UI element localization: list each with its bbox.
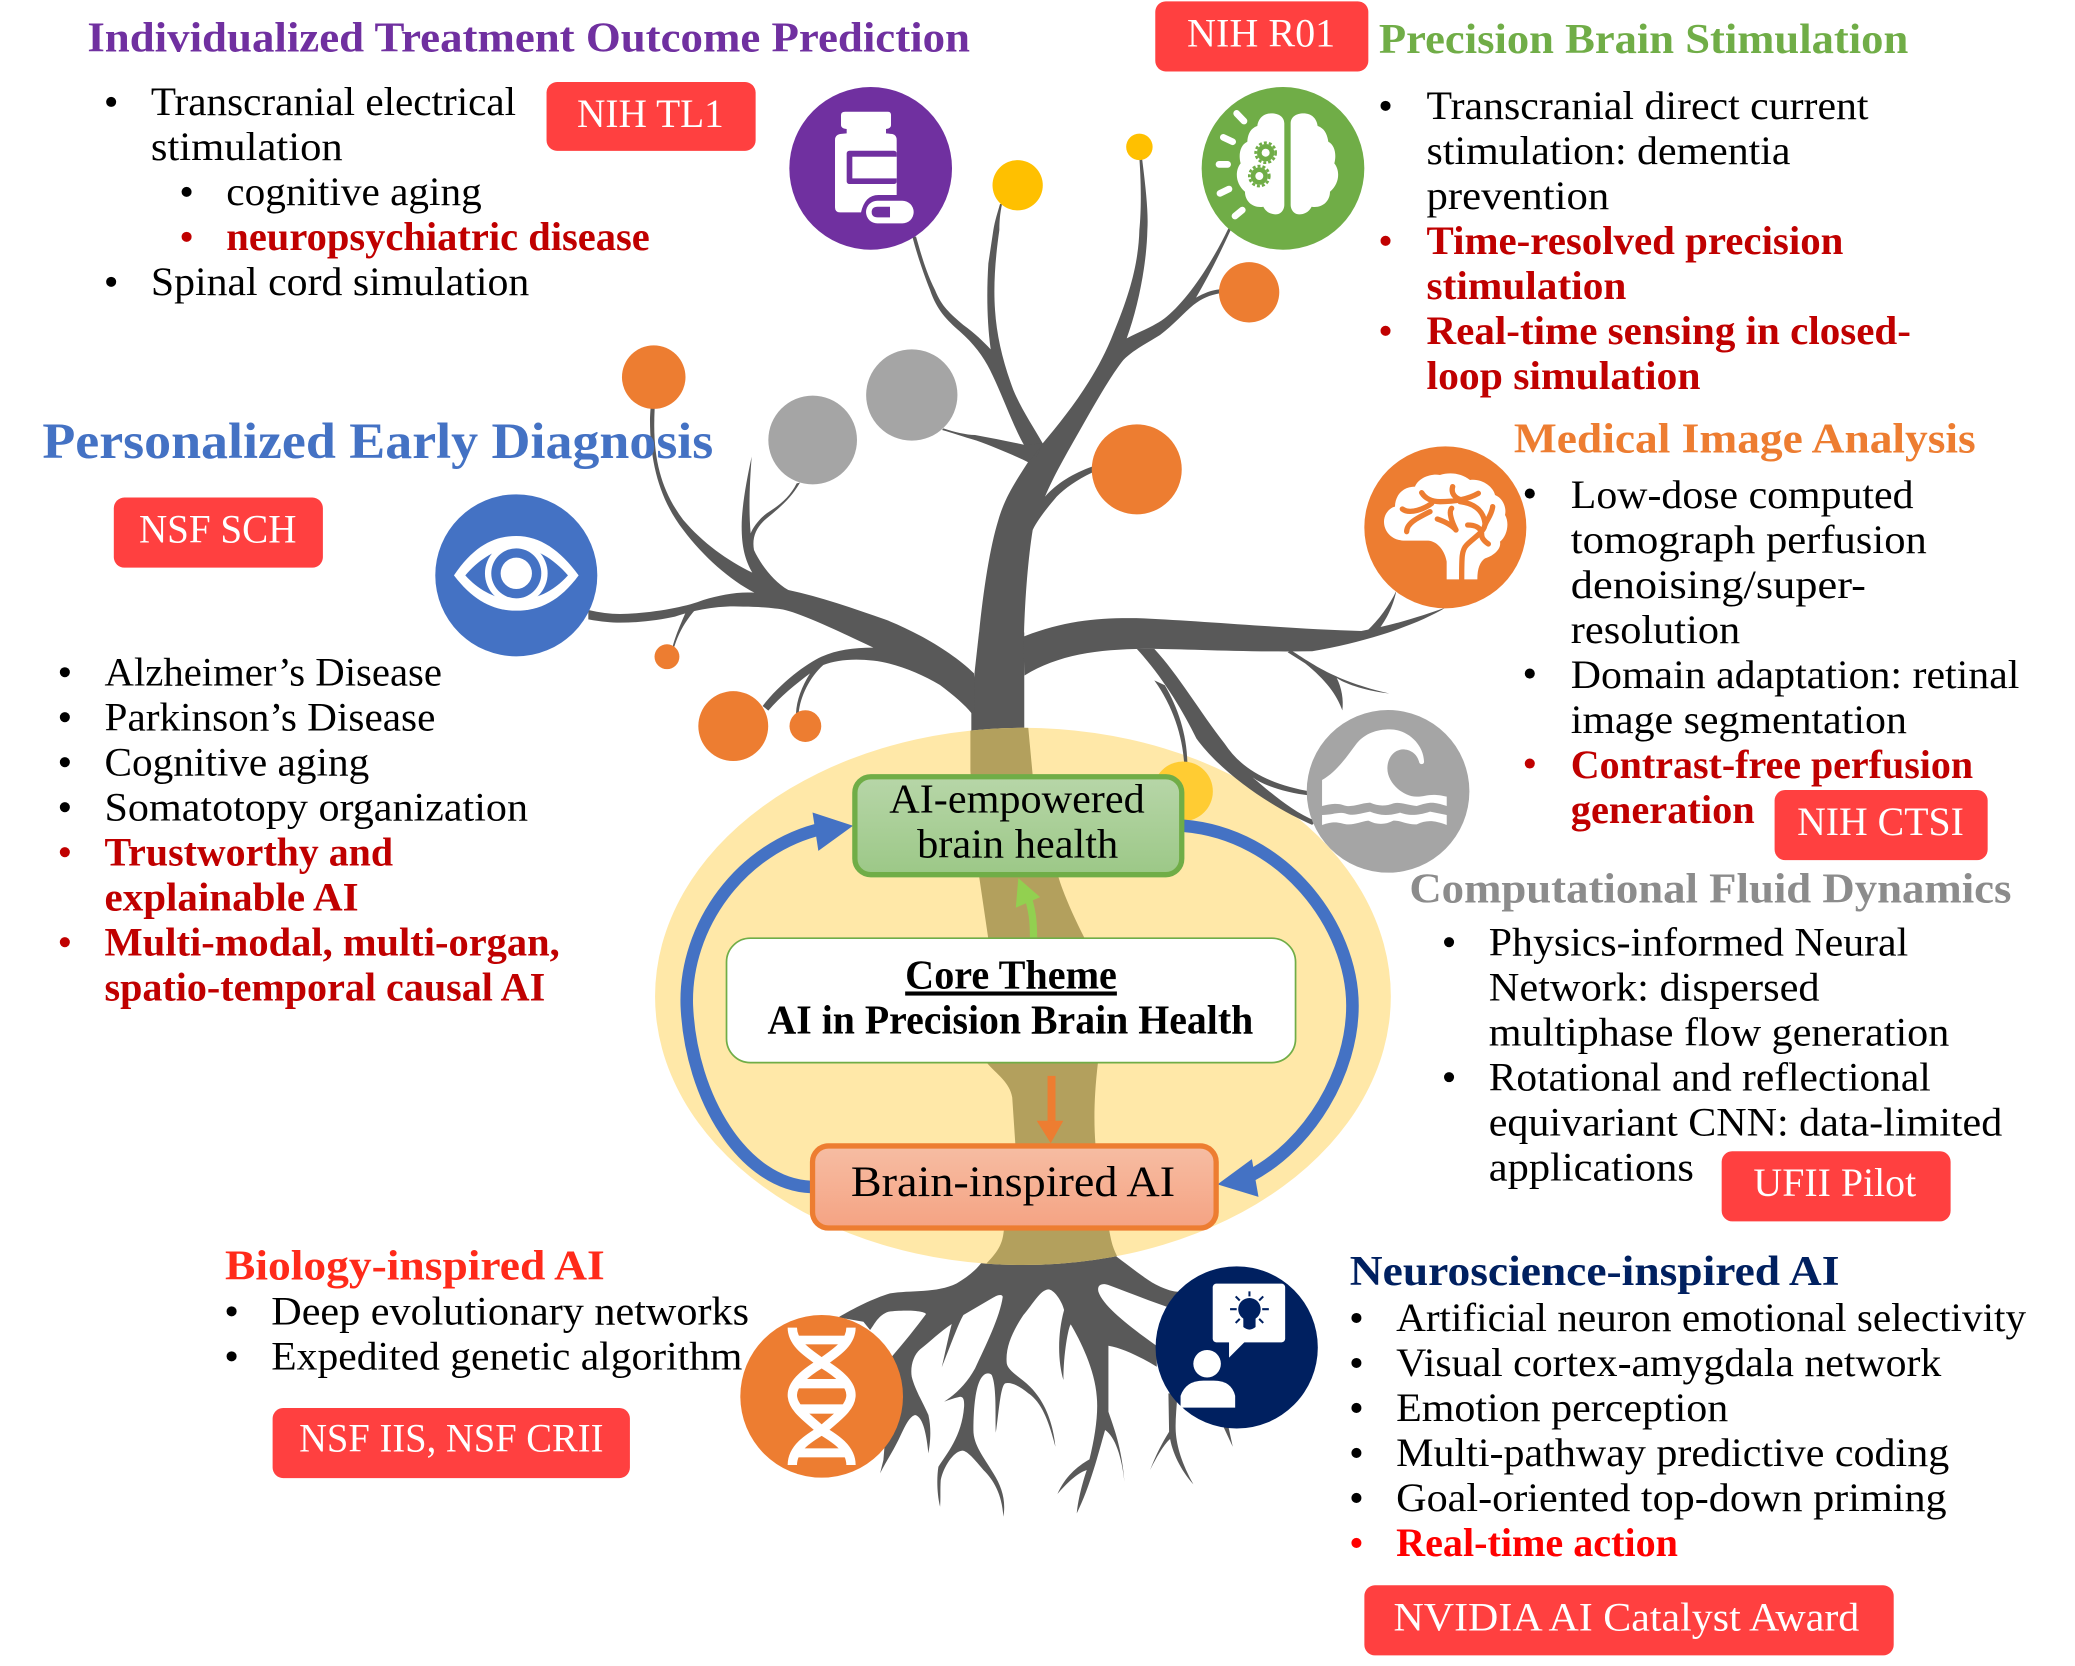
heading: neuroscience-inspired AI: Neuroscience-inspired AI	[1350, 1248, 1839, 1295]
list: personalized early diagnosis: Somatotopy organization	[105, 785, 528, 829]
list: neuroscience-inspired AI: Emotion perception	[1396, 1386, 1728, 1430]
badge: NIH CTSI: NIH CTSI	[1797, 800, 1964, 844]
list: medical image analysis: image segmentation	[1571, 698, 1907, 742]
icon: eye	[435, 494, 597, 656]
list: personalized early diagnosis: Alzheimer’s Disease	[105, 650, 442, 694]
list: biology-inspired AI	[227, 1290, 749, 1379]
list: medical image analysis: Domain adaptation: retinal	[1571, 653, 2019, 697]
badge: NIH TL1: NIH TL1	[577, 92, 724, 136]
fruit circles on the tree	[622, 134, 1279, 821]
list: computational fluid dynamics: equivariant CNN: data-limited	[1489, 1100, 2002, 1144]
list: medical image analysis: resolution	[1571, 608, 1740, 652]
badge: NSF SCH	[114, 498, 323, 568]
list: personalized early diagnosis: Multi-modal, multi-organ,	[105, 920, 560, 964]
badge: NSF IIS, NSF CRII	[273, 1408, 630, 1478]
arrow: core theme to brain-inspired AI	[1037, 1076, 1063, 1143]
panel: medical image analysis	[1514, 416, 2019, 832]
box: brain-inspired AI	[813, 1146, 1216, 1228]
right lower branches over ellipse	[1137, 649, 1316, 825]
list: precision brain stimulation: loop simulation	[1427, 354, 1700, 398]
list: precision brain stimulation: prevention	[1427, 174, 1609, 218]
badge: UFII Pilot	[1722, 1151, 1951, 1221]
list: personalized early diagnosis	[60, 650, 560, 1009]
badge: NVIDIA AI Catalyst Award	[1364, 1585, 1894, 1655]
list: biology-inspired AI: Expedited genetic algorithm	[271, 1335, 743, 1379]
list: medical image analysis: tomograph perfusion	[1571, 518, 1927, 562]
list: medical image analysis	[1525, 473, 2019, 832]
list: biology-inspired AI: Deep evolutionary networks	[271, 1290, 749, 1334]
list: neuroscience-inspired AI	[1351, 1296, 2026, 1565]
box: brain-inspired AI: Brain-inspired AI	[851, 1158, 1175, 1206]
list: precision brain stimulation: stimulation: dementia	[1427, 129, 1791, 173]
list: computational fluid dynamics: multiphase flow generation	[1489, 1010, 1949, 1054]
list: neuroscience-inspired AI: Visual cortex-amygdala network	[1396, 1341, 1942, 1385]
box: core theme: AI in Precision Brain Health	[768, 996, 1253, 1042]
list: neuroscience-inspired AI: Artificial neuron emotional selectivity	[1396, 1296, 2026, 1340]
list: individualized treatment: neuropsychiatric disease	[226, 215, 650, 259]
panel: individualized treatment	[87, 15, 970, 304]
heading: computational fluid dynamics: Computational Fluid Dynamics	[1409, 865, 2011, 912]
panel: neuroscience-inspired AI	[1350, 1248, 2026, 1565]
badge: NSF SCH: NSF SCH	[139, 508, 296, 552]
heading: personalized early diagnosis: Personalized Early Diagnosis	[42, 413, 713, 469]
list: precision brain stimulation: Transcranial direct current	[1427, 84, 1869, 128]
icon: person with idea bubble	[1156, 1266, 1318, 1429]
icon: brain	[1364, 446, 1526, 608]
loop arrow: brain-inspired AI to brain health	[687, 812, 853, 1187]
core ellipse background	[655, 728, 1391, 1265]
box: AI-empowered brain health: AI-empowered	[889, 775, 1145, 821]
box: AI-empowered brain health: brain health	[917, 820, 1118, 866]
trunk seen through the ellipse	[970, 720, 1119, 1281]
icon: brain with gears	[1202, 87, 1364, 250]
list: individualized treatment: stimulation	[151, 125, 343, 169]
arrow: core theme to brain health	[1016, 878, 1040, 938]
list: computational fluid dynamics	[1444, 920, 2002, 1189]
box: core theme: Core Theme	[905, 951, 1117, 997]
list: computational fluid dynamics: Network: dispersed	[1489, 965, 1820, 1009]
panel: biology-inspired AI	[225, 1243, 749, 1379]
icon: pill bottle	[789, 87, 952, 250]
box: AI-empowered brain health	[855, 775, 1182, 875]
badge: NVIDIA AI Catalyst Award: NVIDIA AI Catalyst Award	[1393, 1595, 1859, 1639]
list: individualized treatment: cognitive aging	[226, 170, 482, 214]
list: personalized early diagnosis: Trustworthy and	[105, 830, 393, 874]
badge: NIH R01: NIH R01	[1187, 11, 1335, 55]
heading: precision brain stimulation: Precision Brain Stimulation	[1379, 16, 1908, 63]
list: precision brain stimulation: Real-time sensing in closed-	[1427, 309, 1911, 353]
panel: personalized early diagnosis	[42, 413, 713, 1009]
panel: computational fluid dynamics	[1409, 865, 2011, 1189]
badge: NIH CTSI	[1775, 790, 1988, 860]
tree roots	[838, 1240, 1233, 1517]
icon: wave	[1307, 710, 1469, 873]
badge: NIH TL1	[547, 82, 756, 151]
list: precision brain stimulation	[1381, 84, 1911, 398]
box: core theme	[727, 938, 1296, 1063]
list: personalized early diagnosis: Cognitive aging	[105, 740, 369, 784]
badge: NIH R01	[1155, 1, 1368, 71]
list: medical image analysis: Contrast-free perfusion	[1571, 743, 1973, 787]
list: precision brain stimulation: stimulation	[1427, 264, 1626, 308]
list: precision brain stimulation: Time-resolved precision	[1427, 219, 1843, 263]
list: personalized early diagnosis: spatio-temporal causal AI	[105, 965, 545, 1009]
list: personalized early diagnosis: Parkinson’s Disease	[105, 695, 435, 739]
list: computational fluid dynamics: Physics-informed Neural	[1489, 920, 1908, 964]
list: individualized treatment: Spinal cord simulation	[151, 260, 529, 304]
list: neuroscience-inspired AI: Real-time action	[1396, 1521, 1678, 1565]
panel: precision brain stimulation	[1379, 16, 1911, 398]
heading: biology-inspired AI: Biology-inspired AI	[225, 1243, 605, 1290]
tree crown: trunk and upper branches	[588, 150, 1445, 794]
badge: NSF IIS, NSF CRII: NSF IIS, NSF CRII	[299, 1417, 603, 1461]
loop arrow: brain health to brain-inspired AI	[1183, 826, 1352, 1197]
list: neuroscience-inspired AI: Goal-oriented top-down priming	[1396, 1476, 1947, 1520]
heading: medical image analysis: Medical Image Analysis	[1514, 416, 1976, 463]
list: medical image analysis: generation	[1571, 788, 1755, 832]
list: computational fluid dynamics: Rotational and reflectional	[1489, 1055, 1931, 1099]
list: computational fluid dynamics: applications	[1489, 1145, 1694, 1189]
list: medical image analysis: denoising/super-	[1571, 563, 1866, 607]
list: neuroscience-inspired AI: Multi-pathway predictive coding	[1396, 1431, 1949, 1475]
list: individualized treatment	[106, 80, 650, 304]
list: personalized early diagnosis: explainable AI	[105, 875, 359, 919]
heading: individualized treatment: Individualized Treatment Outcome Prediction	[87, 15, 970, 62]
badge: UFII Pilot: UFII Pilot	[1753, 1161, 1916, 1205]
icon: DNA	[740, 1315, 903, 1478]
list: individualized treatment: Transcranial electrical	[151, 80, 516, 124]
list: medical image analysis: Low-dose computed	[1571, 473, 1914, 517]
